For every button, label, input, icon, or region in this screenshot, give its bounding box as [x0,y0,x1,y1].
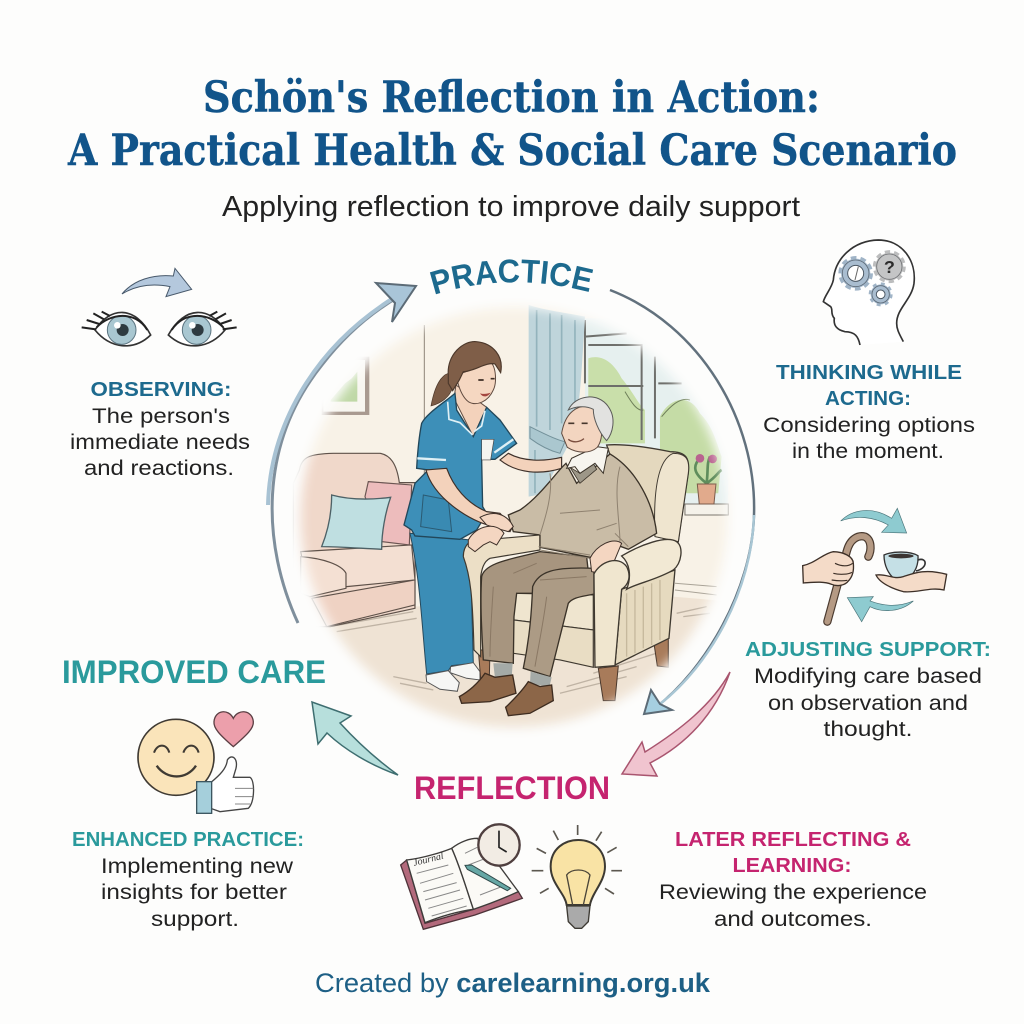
nurse features [478,379,495,380]
man's v-neck shirt [570,463,597,483]
nurse forearm [426,468,513,532]
man's sweater [508,454,657,557]
arrow: pink arrow to Reflection [622,672,730,776]
wall skirting right [675,583,717,595]
arrow: curved arc descending to Reflection [610,290,754,714]
right page [452,838,518,909]
text block: later reflecting and learning: and outcomes. [714,907,872,931]
heading: Reflection: REFLECTION [414,770,610,806]
nurse shoes [426,663,480,691]
text block: enhanced practice: Implementing new [101,854,294,878]
nurse tunic [404,393,517,539]
chair front pillar [594,561,629,667]
gear with exclamation [841,259,870,288]
head outline [823,240,914,345]
hand: man on chair arm [468,526,504,552]
nurse face [456,362,495,404]
wall background [308,306,728,606]
sweater details [539,467,628,558]
icon: cane and cup exchange [803,508,947,622]
text block: enhanced practice: support. [151,907,239,931]
chair lower base [513,620,593,667]
text block: observing [70,378,250,480]
nurse hair [448,342,501,391]
floor [328,596,711,732]
subtitle: Applying reflection to improve daily support [222,191,800,223]
bulb rays [532,825,622,894]
armchair and seated man [459,447,681,716]
text block: later reflecting and learning: LEARNING: [732,854,852,877]
text block: thinking while acting: ACTING: [825,387,911,410]
chair arm top [622,539,681,589]
nurse ponytail [431,373,453,406]
text block: enhanced practice: ENHANCED PRACTICE: [72,828,304,851]
man's right leg [523,568,594,677]
armchair wing [655,453,689,542]
floor shadows [330,607,710,693]
left eye [82,312,151,346]
arrow over eyes [122,268,192,297]
text block: observing: immediate needs [70,430,250,454]
wall corner line [424,325,425,474]
icon: head with gears [823,240,914,345]
thumbs up [197,757,254,813]
text block: enhanced practice [72,828,304,931]
chair back leg [478,650,490,678]
central illustration: carer supporting older man [293,305,729,732]
man's socks [493,663,552,687]
icon: journal and clock [401,824,622,929]
text block: adjusting support: thought. [824,717,912,741]
nurse trousers [410,533,473,674]
chair legs [598,638,668,701]
book cover [401,860,522,929]
heart [214,712,253,747]
text block: adjusting support: on observation and [768,691,968,715]
gear with question mark: ? [884,257,895,277]
text block: thinking while acting [763,361,975,463]
arrow top [841,508,907,533]
icon: smiley, heart and thumbs up [138,712,254,813]
arrow: teal arrow to Improved Care [312,702,398,775]
text block: observing: The person's [92,404,230,428]
cup [884,552,925,580]
text block: later reflecting and learning [659,828,927,931]
hand holding cup [876,572,947,592]
sofa [293,453,415,627]
armchair back [607,445,689,542]
hand: nurse on man's arm [480,513,513,532]
text block: observing: and reactions. [84,456,234,480]
window [585,318,728,515]
man's left leg [481,552,590,663]
smiley [138,719,214,795]
text block: adjusting support: Modifying care based [754,664,982,688]
heading: Practice [430,259,594,294]
right eye [168,312,237,346]
text block: thinking while acting: in the moment. [792,439,944,463]
chair right side [615,570,675,665]
page lines [417,847,503,916]
arrow bottom [847,597,913,622]
title: Schön's Reflection in Action: [203,73,820,123]
pen [465,865,511,891]
nurse tunic details [417,439,513,460]
text block: later reflecting and learning: Reviewing the experience [659,880,927,904]
arrow: curved arc rising to Practice [268,283,416,623]
hand: man on right arm [590,541,622,574]
chair left arm [463,535,540,657]
nurse neck [454,385,487,437]
small gear [871,284,891,304]
blue cushion [322,495,391,549]
title [67,73,957,176]
man's shoes [459,673,553,716]
heading: Improved Care: IMPROVED CARE [62,654,326,690]
light bulb [551,840,605,928]
text block: adjusting support [745,638,991,741]
chair side stripes [627,580,660,657]
nurse upper body [404,342,562,539]
footer credit: Created by carelearning.org.uk [315,968,711,998]
wall picture [322,357,369,415]
journal label: Journal [412,851,445,869]
text block: enhanced practice: insights for better [101,880,287,904]
icon: eyes with arrow [82,268,237,346]
nurse outstretched arm [500,453,562,472]
curtain [529,305,585,497]
text block: observing: OBSERVING: [90,378,232,401]
man's collar [567,447,608,473]
plant on window sill [695,454,722,504]
clock [478,824,520,866]
man's head [562,397,613,452]
trouser creases [490,563,587,667]
text block: adjusting support: ADJUSTING SUPPORT: [745,638,991,661]
cane [827,536,871,622]
hand holding cane [803,552,853,586]
heading: Practice: PRACTICE [430,259,594,294]
pink cushion [365,482,412,545]
left page [407,848,473,923]
chair seat cushion [513,593,593,630]
text block: thinking while acting: Considering options [763,413,975,437]
text block: later reflecting and learning: LATER REFLECTING & [675,828,911,851]
text block: thinking while acting: THINKING WHILE [776,361,962,384]
